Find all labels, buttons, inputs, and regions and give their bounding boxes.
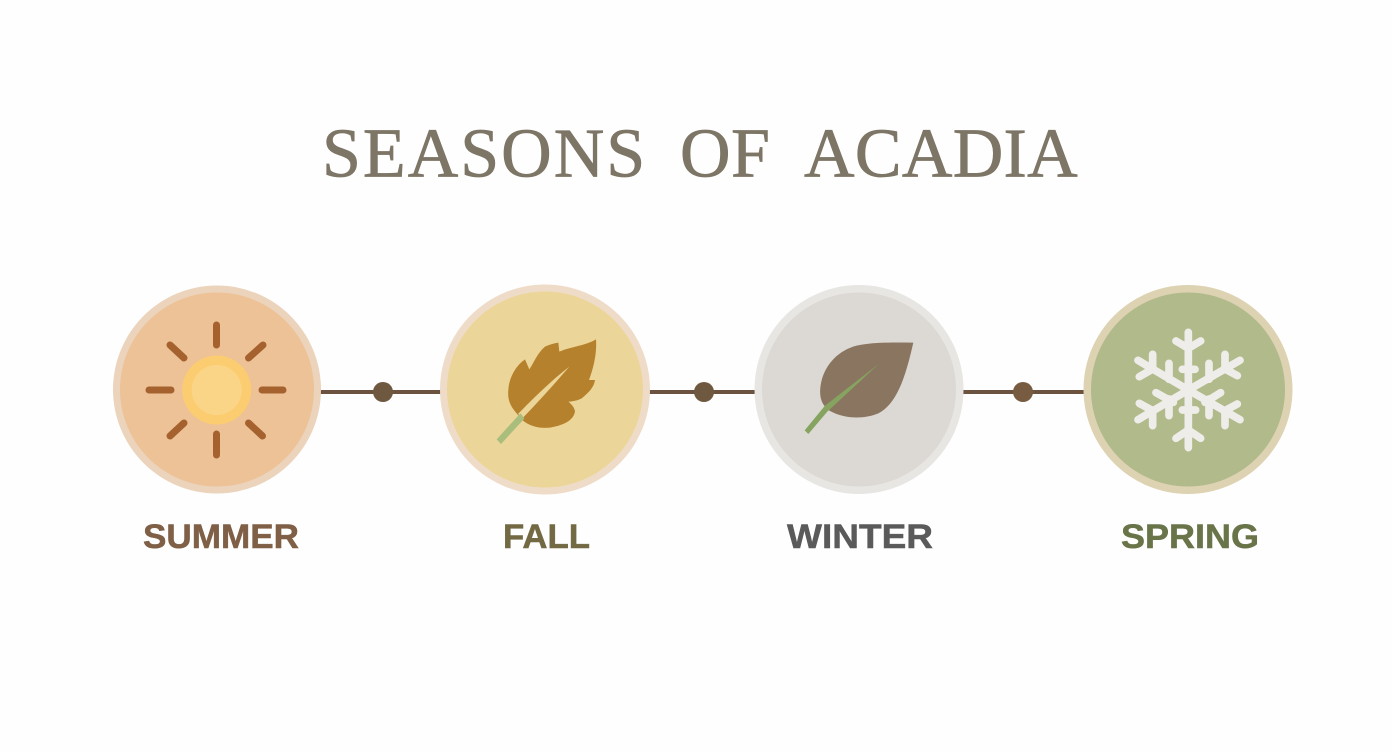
label: spring: SPRING [1121, 518, 1259, 556]
spring circle [1084, 285, 1292, 494]
panel: fall [440, 284, 650, 556]
icon: fall leaf [497, 339, 596, 444]
icon: snowflake [1138, 332, 1240, 448]
label: summer: SUMMER [143, 518, 299, 556]
icon: sun [149, 325, 283, 455]
fall circle [440, 284, 650, 494]
label: winter: WINTER [787, 518, 933, 556]
timeline connector: winter to spring [963, 382, 1085, 402]
panel: spring [1084, 285, 1292, 556]
panel: winter [754, 285, 964, 556]
title: SEASONS [322, 116, 647, 192]
timeline connector: fall to winter [649, 382, 756, 402]
title: OF [680, 116, 770, 192]
label: fall: FALL [503, 518, 590, 556]
summer circle [113, 286, 321, 494]
winter circle [754, 285, 964, 494]
panel: summer [113, 286, 321, 556]
icon: winter leaf [805, 343, 913, 434]
timeline connector: summer to fall [320, 382, 441, 402]
title: ACADIA [804, 116, 1078, 192]
